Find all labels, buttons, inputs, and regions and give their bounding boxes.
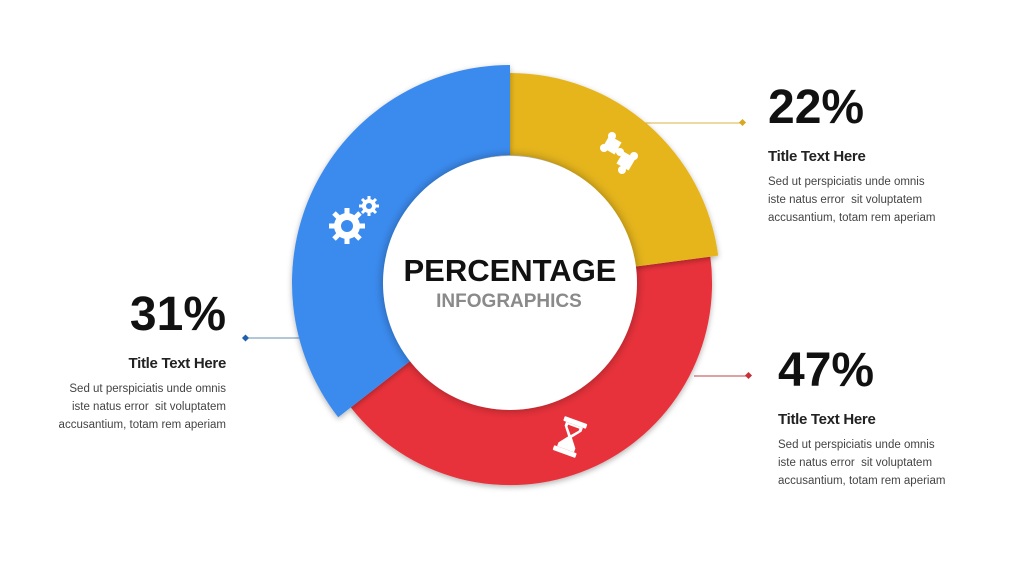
segment: blue 31%	[292, 65, 510, 417]
center title	[403, 253, 617, 312]
center title: INFOGRAPHICS	[436, 291, 582, 312]
icon: gears	[329, 196, 379, 244]
block: 22%	[768, 81, 935, 224]
block: 47%: accusantium, totam rem aperiam	[778, 475, 945, 487]
connector lines	[242, 119, 752, 379]
block: 47%: Title Text Here	[778, 411, 875, 428]
center title: PERCENTAGE	[403, 253, 617, 288]
center circle	[383, 156, 637, 410]
icon: hourglass	[553, 416, 587, 458]
block: 22%: accusantium, totam rem aperiam	[768, 212, 935, 224]
block: 31%: Title Text Here	[129, 355, 226, 372]
block: 31%: accusantium, totam rem aperiam	[59, 419, 226, 431]
block: 47%	[778, 344, 945, 487]
block: 47%: iste natus error sit voluptatem	[778, 457, 932, 469]
segment: yellow 22%	[510, 73, 718, 267]
segment: red 47%	[351, 257, 712, 485]
block: 22%: Sed ut perspiciatis unde omnis	[768, 176, 925, 188]
block: 47%: 47%	[778, 344, 874, 397]
block: 47%: Sed ut perspiciatis unde omnis	[778, 439, 935, 451]
block: 31%	[59, 288, 226, 431]
block: 31%: iste natus error sit voluptatem	[72, 401, 226, 413]
block: 31%: 31%	[130, 288, 226, 341]
block: 22%: Title Text Here	[768, 148, 865, 165]
block: 31%: Sed ut perspiciatis unde omnis	[69, 383, 226, 395]
block: 22%: 22%	[768, 81, 864, 134]
block: 22%: iste natus error sit voluptatem	[768, 194, 922, 206]
icon: puzzle	[600, 132, 638, 174]
